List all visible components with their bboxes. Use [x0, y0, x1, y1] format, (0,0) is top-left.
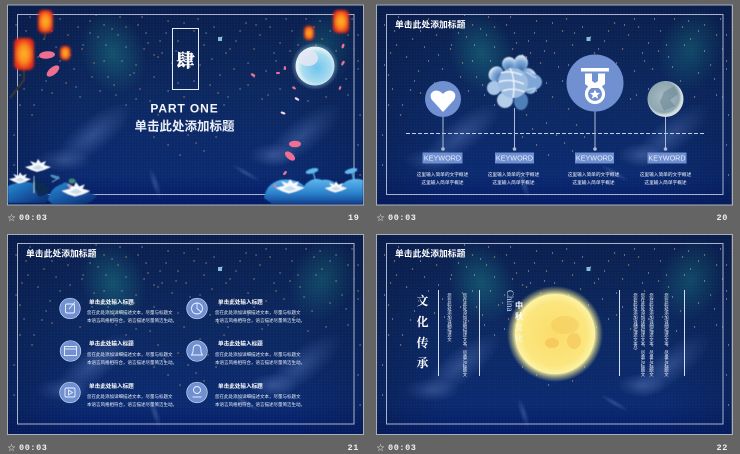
- vertical heading: [416, 293, 429, 370]
- panel: slide 21 six feature list: [8, 230, 367, 435]
- slide title: 单击此处添加标题: [395, 18, 466, 30]
- feature texts: 本语言风格相符合，语言描述尽量简洁生动。: [87, 401, 177, 408]
- dashed timeline: [406, 132, 704, 134]
- status row: slide 21: [8, 443, 359, 453]
- keyword 2: KEYWORD: [496, 154, 533, 163]
- vertical heading: 化: [416, 314, 429, 329]
- section subtitle: 单击此处添加标题: [134, 118, 235, 134]
- status row: slide 21: ☆: [8, 444, 16, 452]
- feature texts: 单击此处输入标题: [89, 298, 134, 306]
- stems: [443, 108, 666, 149]
- icon: heart: [425, 81, 461, 117]
- feature texts: 单击此处输入标题: [218, 382, 263, 390]
- feature texts: 您在此处添加详细描述文本，尽量与标题文: [87, 309, 173, 316]
- right vertical copy: 您在此处添加详细描述文本，尽量与标题文: [664, 292, 670, 378]
- vertical festival label: 化: [515, 333, 523, 343]
- feature texts: 本语言风格相符合，语言描述尽量简洁生动。: [215, 317, 305, 324]
- status row: slide 22: 00:03: [388, 443, 417, 453]
- icon glyphs: [64, 302, 202, 397]
- status row: slide 22: 22: [716, 443, 728, 453]
- panel: slide 20 keyword timeline: [376, 0, 736, 205]
- slide title: 单击此处添加标题: [395, 248, 466, 258]
- feature texts: 单击此处输入标题: [218, 340, 263, 348]
- vertical festival label: [515, 300, 523, 343]
- keyword descriptions: 这里输入简单的文字概述: [568, 171, 620, 178]
- feature texts: 您在此处添加详细描述文本，尽量与标题文: [215, 351, 301, 358]
- status row: slide 19: 00:03: [19, 213, 48, 223]
- inner frame: [18, 244, 354, 424]
- vertical rules: [438, 290, 684, 376]
- right vertical copy: 您在此处添加详细描述文本，尽量与标题文: [649, 292, 654, 378]
- stem dots: [441, 147, 667, 151]
- blue moon: [291, 42, 339, 90]
- icon discs: [60, 298, 207, 403]
- status row: slide 19: 19: [348, 213, 359, 223]
- falling petals: [39, 43, 345, 176]
- china label: China: [505, 290, 515, 312]
- left vertical copy: 您在此处添加详细描述文: [447, 292, 452, 343]
- feature texts: 单击此处输入标题: [218, 298, 263, 306]
- right vertical copy: 您在此处添加详细描述文本尽: [633, 292, 638, 352]
- status row: slide 22: ☆: [376, 444, 384, 452]
- vertical festival label: 秋: [515, 311, 523, 321]
- keyword descriptions: 这里输入简单的文字概述: [417, 171, 469, 178]
- status row: slide 20: 00:03: [388, 213, 417, 223]
- keyword descriptions: [417, 171, 692, 186]
- left vertical copy: [447, 292, 468, 378]
- lotus right: [264, 167, 363, 204]
- lotus left: [8, 159, 97, 204]
- icon: grey moon: [648, 81, 684, 117]
- slide title: 单击此处添加标题: [26, 248, 97, 258]
- keyword descriptions: 这里输入简单的文字概述: [488, 171, 540, 178]
- feature texts: 本语言风格相符合，语言描述尽量简洁生动。: [215, 401, 305, 408]
- feature texts: 单击此处输入标题: [89, 340, 134, 348]
- keyword descriptions: 这里输入简单字概述: [492, 179, 535, 186]
- feature texts: 您在此处添加详细描述文本，尽量与标题文: [87, 351, 173, 358]
- status row: slide 22: [376, 443, 728, 453]
- moon: [507, 286, 603, 382]
- panel: slide 22 culture heritage: [376, 230, 736, 435]
- inner frame: [18, 14, 354, 194]
- keyword descriptions: 这里输入简单字概述: [644, 179, 687, 186]
- feature texts: 您在此处添加详细描述文本，尽量与标题文: [215, 309, 301, 316]
- vertical title box: [172, 28, 198, 90]
- feature texts: 您在此处添加详细描述文本，尽量与标题文: [215, 393, 301, 400]
- inner frame: [386, 244, 723, 424]
- vertical heading: 传: [416, 335, 429, 350]
- feature texts: [87, 298, 305, 408]
- status row: slide 19: ☆: [8, 214, 16, 222]
- right vertical copy: 您在此处添加详细描述文本，尽量与标题文: [640, 292, 646, 378]
- left vertical copy: 您在此处添加详细描述文本，尽量与标题文: [462, 292, 468, 378]
- feature texts: 单击此处输入标题: [89, 382, 134, 390]
- feature texts: 本语言风格相符合，语言描述尽量简洁生动。: [87, 359, 177, 366]
- keyword 1: KEYWORD: [424, 154, 461, 163]
- status row: slide 20: 20: [716, 213, 728, 223]
- status row: slide 19: [8, 213, 359, 223]
- keyword 4: KEYWORD: [648, 154, 686, 163]
- inner frame: [386, 14, 723, 194]
- section heading: PART ONE: [150, 101, 219, 115]
- right vertical copy: [633, 292, 670, 378]
- vertical festival label: 中: [515, 300, 523, 310]
- feature texts: 您在此处添加详细描述文本，尽量与标题文: [87, 393, 173, 400]
- vertical title box: 肆: [176, 47, 194, 73]
- keyword descriptions: 这里输入简单字概述: [572, 179, 615, 186]
- lanterns left: [10, 10, 70, 98]
- vertical festival label: 文: [515, 322, 523, 332]
- icon: peony flower: [485, 55, 542, 110]
- icon: medal: [566, 54, 624, 112]
- vertical heading: 承: [416, 355, 429, 370]
- status row: slide 20: [376, 213, 728, 223]
- status row: slide 21: 21: [348, 443, 359, 453]
- feature texts: 本语言风格相符合，语言描述尽量简洁生动。: [215, 359, 305, 366]
- feature texts: 本语言风格相符合，语言描述尽量简洁生动。: [87, 317, 177, 324]
- status row: slide 20: ☆: [376, 214, 384, 222]
- panel: slide 19 section cover: [8, 0, 367, 205]
- lanterns right: [304, 10, 349, 40]
- status row: slide 21: 00:03: [19, 443, 48, 453]
- vertical heading: 文: [416, 293, 429, 308]
- keyword 3: KEYWORD: [576, 154, 613, 163]
- keyword descriptions: 这里输入简单的文字概述: [640, 171, 692, 178]
- keyword descriptions: 这里输入简单字概述: [421, 179, 464, 186]
